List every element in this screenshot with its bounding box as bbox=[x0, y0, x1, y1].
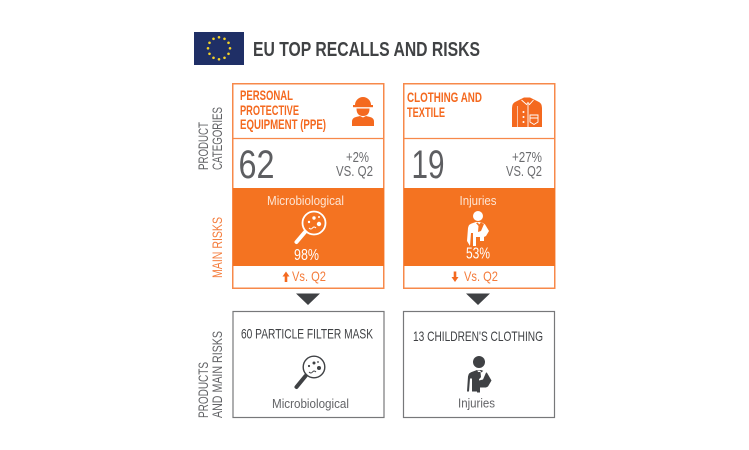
side label: main risks: MAIN RISKS bbox=[209, 217, 225, 278]
icon: magnifier with microbes bbox=[296, 212, 326, 242]
change: +2% vs Q2 bbox=[336, 150, 373, 180]
panel: personal protective equipment bbox=[233, 84, 384, 288]
risk label: microbiological: Microbiological bbox=[272, 396, 349, 411]
trend: down vs Q2: Vs. Q2 bbox=[464, 268, 498, 284]
category heading: clothing: TEXTILE bbox=[407, 104, 445, 120]
arrow: right down bbox=[466, 294, 490, 305]
change: +27% vs Q2 bbox=[506, 150, 542, 180]
icon: construction worker bbox=[352, 97, 374, 126]
side label: products and main risks bbox=[195, 331, 225, 418]
stat: 53%: 53% bbox=[466, 246, 490, 262]
arrow: left down bbox=[296, 294, 320, 305]
icon: shirt bbox=[512, 98, 542, 127]
category heading: PPE bbox=[240, 87, 326, 132]
icon: magnifier dark bbox=[296, 356, 325, 387]
icon: injured person dark bbox=[467, 356, 492, 392]
side label: product categories: PRODUCT bbox=[195, 122, 211, 170]
risk label: injuries: Injuries bbox=[458, 396, 495, 410]
product heading: children's clothing: 13 CHILDREN'S CLOTHING bbox=[413, 328, 543, 344]
trend: up vs Q2: Vs. Q2 bbox=[292, 268, 326, 284]
category heading: clothing: CLOTHING AND bbox=[407, 89, 482, 105]
panel: clothing and textile bbox=[404, 84, 555, 288]
risk label: injuries: Injuries bbox=[460, 193, 497, 208]
side label: product categories: CATEGORIES bbox=[209, 107, 225, 170]
change: +2% vs Q2: VS. Q2 bbox=[336, 164, 373, 180]
change: +27% vs Q2: +27% bbox=[512, 150, 542, 166]
change: +2% vs Q2: +2% bbox=[346, 150, 369, 166]
side label: products and main risks: AND MAIN RISKS bbox=[209, 331, 225, 418]
main risk band bbox=[404, 188, 555, 266]
side label: products and main risks: PRODUCTS bbox=[195, 362, 211, 418]
trend: up vs Q2 bbox=[282, 268, 326, 284]
stat: 19: 19 bbox=[412, 143, 444, 187]
category heading: PPE: PROTECTIVE bbox=[240, 102, 299, 118]
category heading: clothing bbox=[407, 89, 482, 120]
category heading: PPE: PERSONAL bbox=[240, 87, 293, 103]
category heading: PPE: EQUIPMENT (PPE) bbox=[240, 116, 326, 132]
change: +27% vs Q2: VS. Q2 bbox=[506, 164, 542, 180]
title: EU TOP RECALLS AND RISKS bbox=[253, 39, 480, 61]
panel: particle filter mask bbox=[233, 312, 384, 418]
panel: children's clothing bbox=[404, 312, 554, 418]
icon: injured person bbox=[467, 211, 489, 246]
stat: 98%: 98% bbox=[294, 247, 319, 264]
risk label: microbiological: Microbiological bbox=[267, 193, 344, 208]
side label: product categories bbox=[195, 107, 225, 170]
trend: down vs Q2 bbox=[452, 268, 498, 284]
main risk band bbox=[233, 188, 384, 266]
product heading: particle filter mask: 60 PARTICLE FILTER MASK bbox=[241, 326, 373, 342]
icon: EU flag bbox=[194, 32, 244, 65]
stat: 62: 62 bbox=[238, 143, 274, 187]
